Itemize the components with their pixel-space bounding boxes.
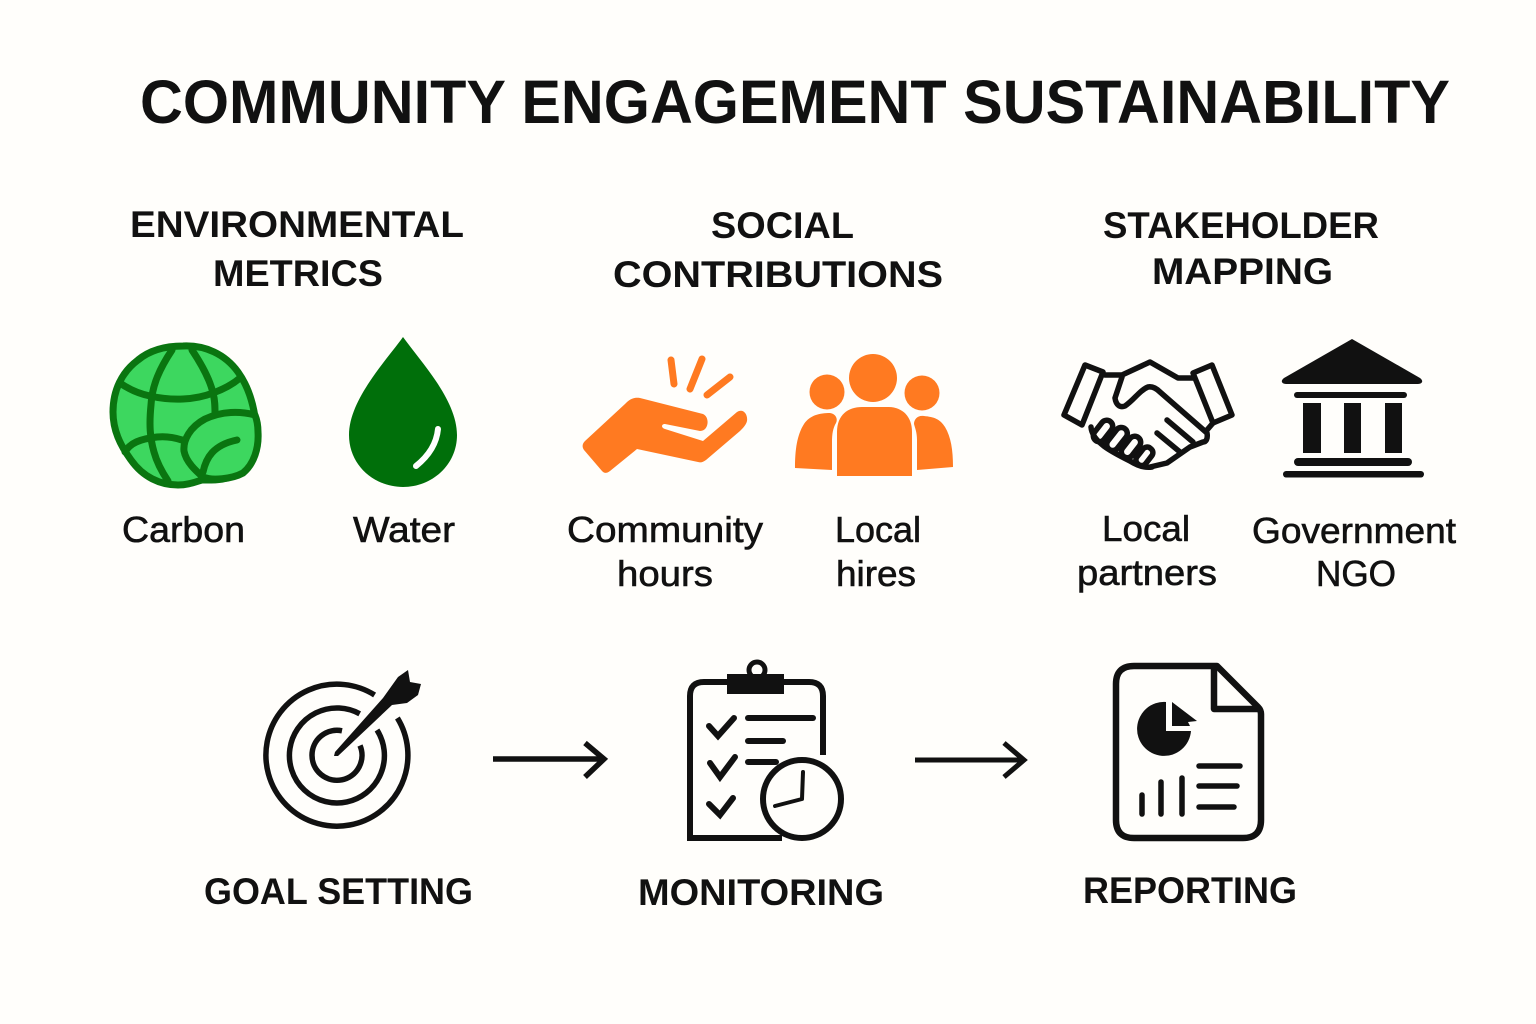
icon: group of people — [795, 354, 953, 476]
label: monitoring: MONITORING — [638, 872, 884, 913]
heading: stakeholder mapping — [1103, 205, 1379, 292]
label: local partners: Local — [1102, 508, 1190, 549]
panel: environmental metrics — [113, 204, 464, 550]
heading: social contributions — [613, 205, 943, 295]
heading: environmental metrics: ENVIRONMENTAL — [130, 204, 464, 245]
label: government NGO — [1252, 510, 1456, 594]
panel: stakeholder mapping — [1064, 205, 1456, 594]
icon: handshake — [1064, 362, 1232, 468]
label: community hours: hours — [617, 553, 713, 594]
icon: clipboard with clock — [690, 662, 841, 838]
heading: environmental metrics: METRICS — [213, 253, 383, 294]
label: community hours — [567, 509, 763, 594]
label: local hires: hires — [836, 553, 916, 594]
heading: social contributions: SOCIAL — [711, 205, 854, 246]
arrow: monitoring to reporting — [915, 743, 1024, 777]
label: local hires: Local — [835, 509, 921, 550]
heading: stakeholder mapping: MAPPING — [1152, 251, 1333, 292]
icon: target with dart — [266, 670, 421, 826]
panel: social contributions — [567, 205, 953, 594]
icon: helping hand — [583, 359, 747, 473]
arrow: goal setting to monitoring — [493, 743, 604, 777]
icon: water drop — [349, 337, 457, 487]
icon: globe with leaf — [113, 346, 258, 485]
label: local partners: partners — [1077, 552, 1217, 593]
heading: environmental metrics — [130, 204, 464, 294]
label: reporting: REPORTING — [1083, 870, 1297, 911]
label: local partners — [1077, 508, 1217, 593]
label: goal setting: GOAL SETTING — [204, 871, 473, 912]
label: local hires — [835, 509, 921, 594]
label: community hours: Community — [567, 509, 763, 550]
icon: report document — [1116, 666, 1261, 838]
label: carbon: Carbon — [122, 509, 245, 550]
title: COMMUNITY ENGAGEMENT SUSTAINABILITY — [140, 68, 1450, 136]
label: government NGO: NGO — [1316, 553, 1396, 594]
heading: social contributions: CONTRIBUTIONS — [613, 254, 943, 295]
heading: stakeholder mapping: STAKEHOLDER — [1103, 205, 1379, 246]
panel: process flow — [204, 662, 1297, 913]
label: government NGO: Government — [1252, 510, 1456, 551]
label: water: Water — [353, 509, 455, 550]
icon: government building — [1282, 339, 1424, 478]
